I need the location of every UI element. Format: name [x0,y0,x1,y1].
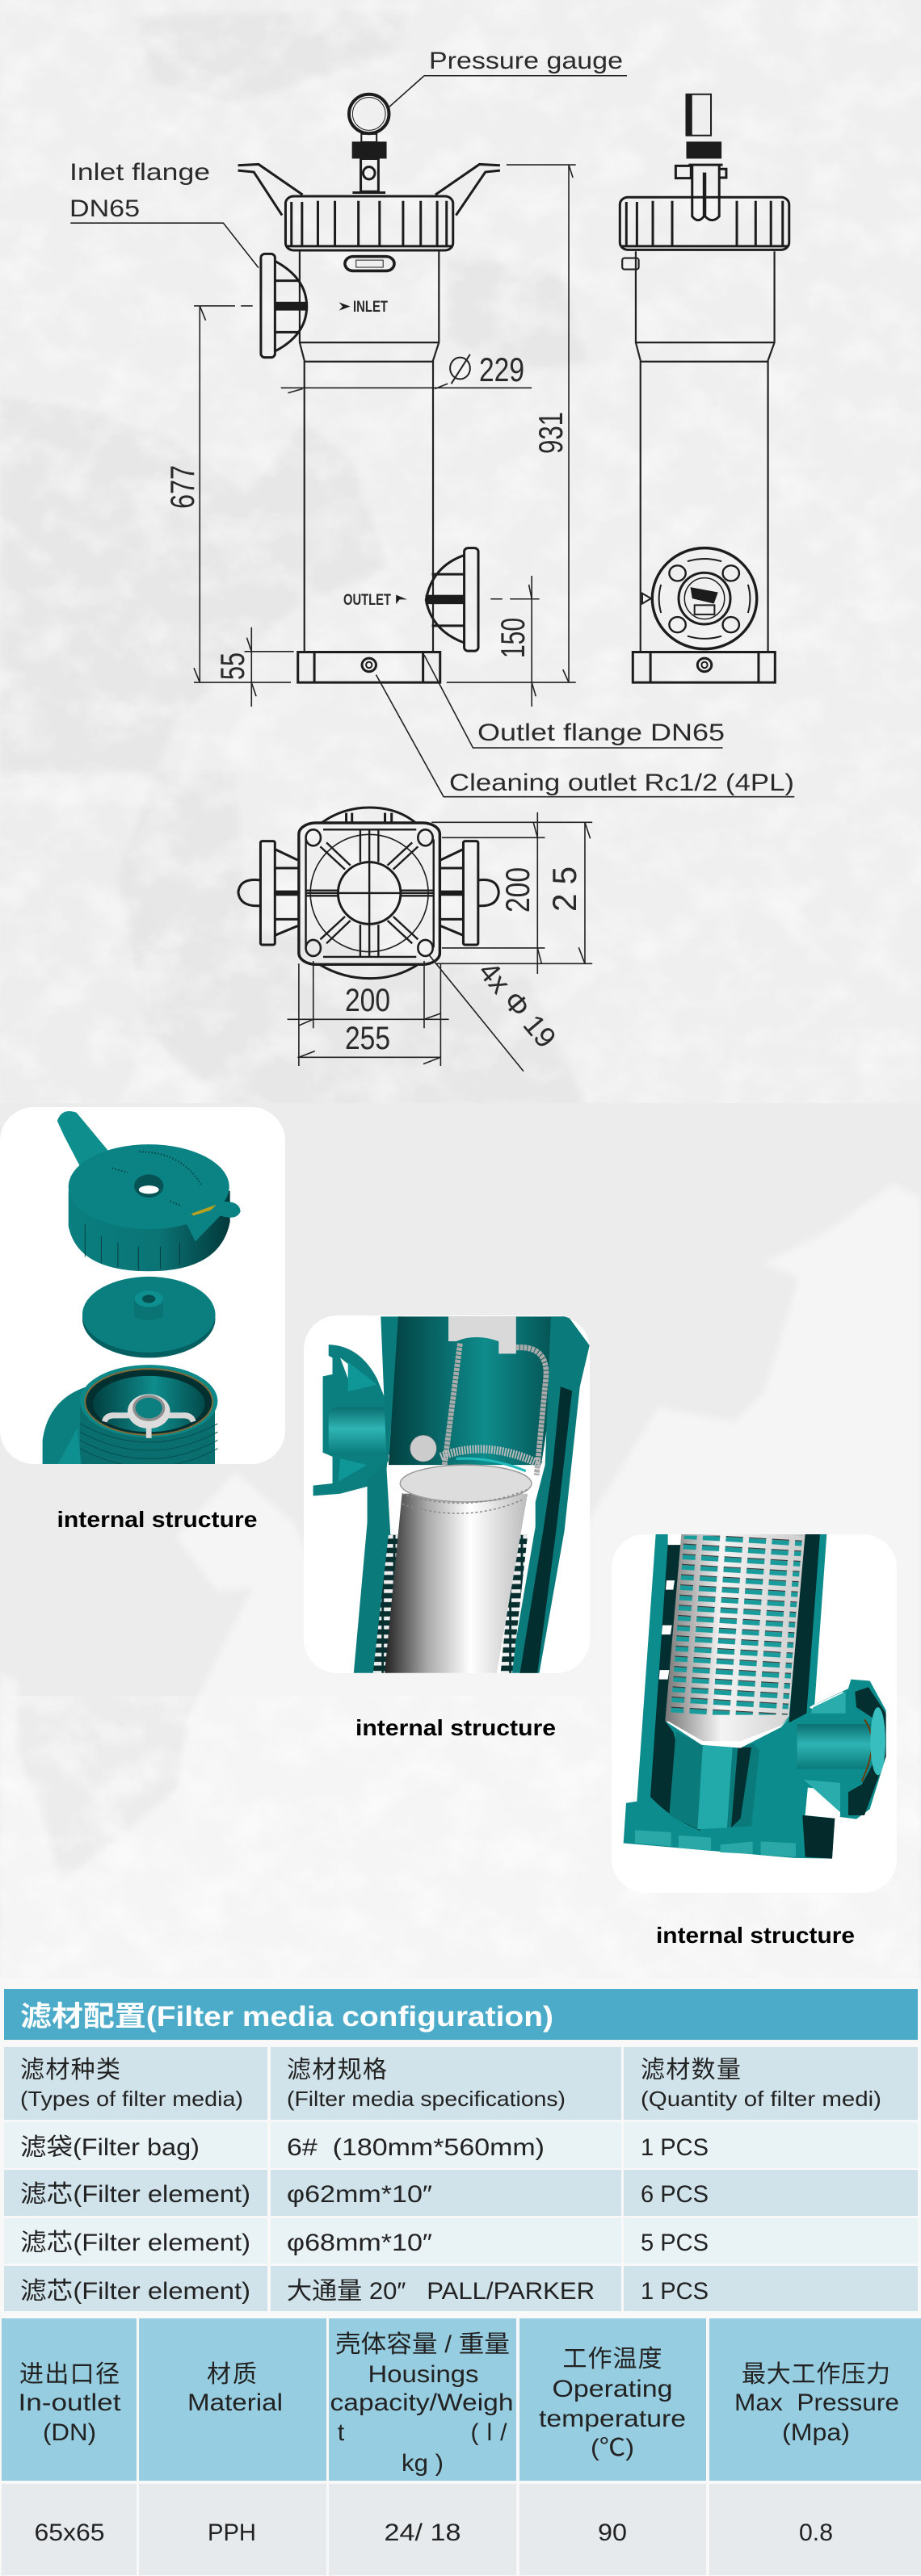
body shell [300,251,439,652]
dimension: 200 horizontal: 200 [345,983,390,1018]
label: cleaning outlet: Cleaning outlet Rc1/2 (4PL) [449,770,794,796]
table row: spec header cells: kg ) [402,2450,444,2477]
icon: flange gaps [805,1692,846,1817]
icon: flanges [238,841,498,945]
icon: lid handle [57,1111,108,1166]
side base [633,652,775,682]
drawing: front and side elevation views [69,48,794,797]
table row: filter bag: 6# (180mm*560mm) [287,2134,545,2161]
icon: inlet flange [261,254,308,358]
icon: outlet pipe [797,1687,886,1815]
table row: spec header cells: 最大工作压力 [742,2361,890,2388]
table row: filter bag: 1 PCS [641,2134,709,2161]
panel: card cutaway upper [304,1315,590,1673]
table row: filter element 68: 滤芯(Filter element) [20,2230,250,2256]
table row: filter bag [4,2122,918,2168]
front view machine [70,76,794,797]
panel: card cutaway lower [612,1534,897,1893]
table row: header: 滤材规格 [287,2057,387,2083]
icon: lid arcs [320,808,417,979]
table row: spec header cells: 壳体容量 / 重量 [335,2331,510,2358]
table row: spec header cells: temperature [539,2406,686,2432]
table row: spec header cells: capacity/Weigh [330,2389,514,2416]
table row: filter element 20 inch: 滤芯(Filter element) [20,2278,250,2305]
label: DN65: DN65 [69,195,140,222]
table row: filter element 62 [4,2170,918,2216]
label: internal structure 2: internal structure [355,1715,556,1740]
dimension: 55: 55 [213,652,251,680]
dimension: 931: 931 [532,412,570,454]
table row: filter element 20 inch: 1 PCS [641,2278,709,2305]
table row: spec values [2,2484,921,2575]
table row: spec header cells: 工作温度 [562,2346,662,2373]
table row: spec header cells: 材质 [207,2361,257,2388]
label: outlet flange: Outlet flange DN65 [477,720,725,746]
icon: lid [69,1144,241,1271]
drawing: top view [238,808,592,1072]
table: filter media configuration [4,2047,918,2311]
label: outlet mark: OUTLET [343,592,391,609]
table row: filter element 62: 滤芯(Filter element) [20,2181,250,2208]
label: internal structure 1: internal structure [57,1507,257,1532]
table row: spec header cells: (Mpa) [782,2419,850,2446]
dimension: 255 horizontal: 255 [345,1021,390,1056]
icon: outlet flange [426,548,478,651]
phi symbol [450,355,470,384]
icon: lid handles [238,164,500,216]
table row: spec header cells: ( l / [470,2419,507,2446]
label: inlet flange: Inlet flange [69,159,210,186]
table row: filter element 62: φ62mm*10″ [287,2181,432,2208]
table row: header [4,2047,918,2120]
dimension: 200 vertical: 200 [498,867,536,913]
icon: side gauge and clamp [675,94,726,220]
background: world map section 2 [0,1103,921,1987]
icon: base pockets [635,1830,796,1857]
icon: lower chamber [669,1732,759,1829]
table row: spec header cells: In-outlet [18,2389,121,2416]
icon: lid with ribs [285,196,453,250]
icon: side flange face [642,548,757,649]
background: world map section 1 [0,0,921,1113]
icon: bag ring and handle [373,1316,546,1673]
side body [622,251,775,652]
table row: spec values: 24/ 18 [385,2519,460,2546]
table row: spec header cells: Max Pressure [734,2389,899,2416]
table row: header: (Types of filter media) [20,2087,243,2111]
table row: filter element 68: φ68mm*10″ [287,2230,432,2256]
dimension: 25 vertical: 2 5 [545,866,583,912]
icon: vessel body [624,1534,886,1859]
table row: spec header cells: Housings [368,2361,478,2388]
icon: perforated screen [665,1534,805,1748]
table row: spec header cells: Operating [553,2376,672,2402]
side view machine [620,94,789,682]
table row: spec values: 65x65 [34,2519,105,2546]
dimension: 150: 150 [494,618,532,658]
icon: base with cleaning port [298,652,440,682]
table row: filter bag: 滤袋(Filter bag) [20,2134,200,2161]
dimension: 677: 677 [163,465,201,509]
icon: vessel walls [354,1316,590,1673]
table row: spec values: PPH [208,2519,256,2546]
table row: filter element 68 [4,2218,918,2263]
table row: spec values: 90 [598,2519,627,2546]
table row: filter element 62: 6 PCS [641,2181,709,2208]
table row: spec values: 0.8 [799,2519,833,2546]
table row: spec header cells: (℃) [591,2435,634,2461]
panel: card exploded lid [0,1107,285,1467]
table row: spec header cells: 进出口径 [19,2361,120,2388]
icon: pressure gauge [349,94,389,193]
table row: spec header cells: (DN) [43,2419,96,2446]
table row: filter element 20 inch: 大通量 20″ PALL/PARKER [287,2278,595,2305]
table row: header: (Quantity of filter medi) [641,2087,881,2111]
table row: spec header cells [2,2318,921,2481]
table row: spec header cells: t [338,2419,345,2446]
table row: spec header cells: Material [187,2389,283,2416]
dimension lines [70,76,794,797]
table row: filter element 68: 5 PCS [641,2230,709,2256]
title bar: filter media configuration [4,1989,918,2040]
dimension: 4x 19: 4x Φ 19 [472,955,563,1054]
label: inlet mark: INLET [353,299,388,316]
icon: housing opening [43,1365,217,1467]
icon: square plate with ribs [299,823,439,964]
dimension lines [288,812,592,1072]
label: pressure gauge: Pressure gauge [429,48,623,74]
icon: inner wall [650,1543,700,1831]
sight window [345,257,394,271]
dimension: 229: 229 [479,350,524,388]
table row: header: (Filter media specifications) [287,2087,566,2111]
title bar: filter media configuration: 滤材配置(Filter media configuration) [20,2001,553,2033]
icon: inlet flange section [313,1345,392,1496]
inlet outlet arrows [339,302,407,604]
table row: filter element 20 inch [4,2266,918,2311]
table row: header: 滤材数量 [641,2057,741,2083]
icon: side lid [620,197,789,250]
icon: baffle disc [82,1277,216,1357]
table row: header: 滤材种类 [20,2057,120,2083]
label: internal structure 3: internal structure [656,1923,855,1948]
table: specifications [2,2318,921,2575]
